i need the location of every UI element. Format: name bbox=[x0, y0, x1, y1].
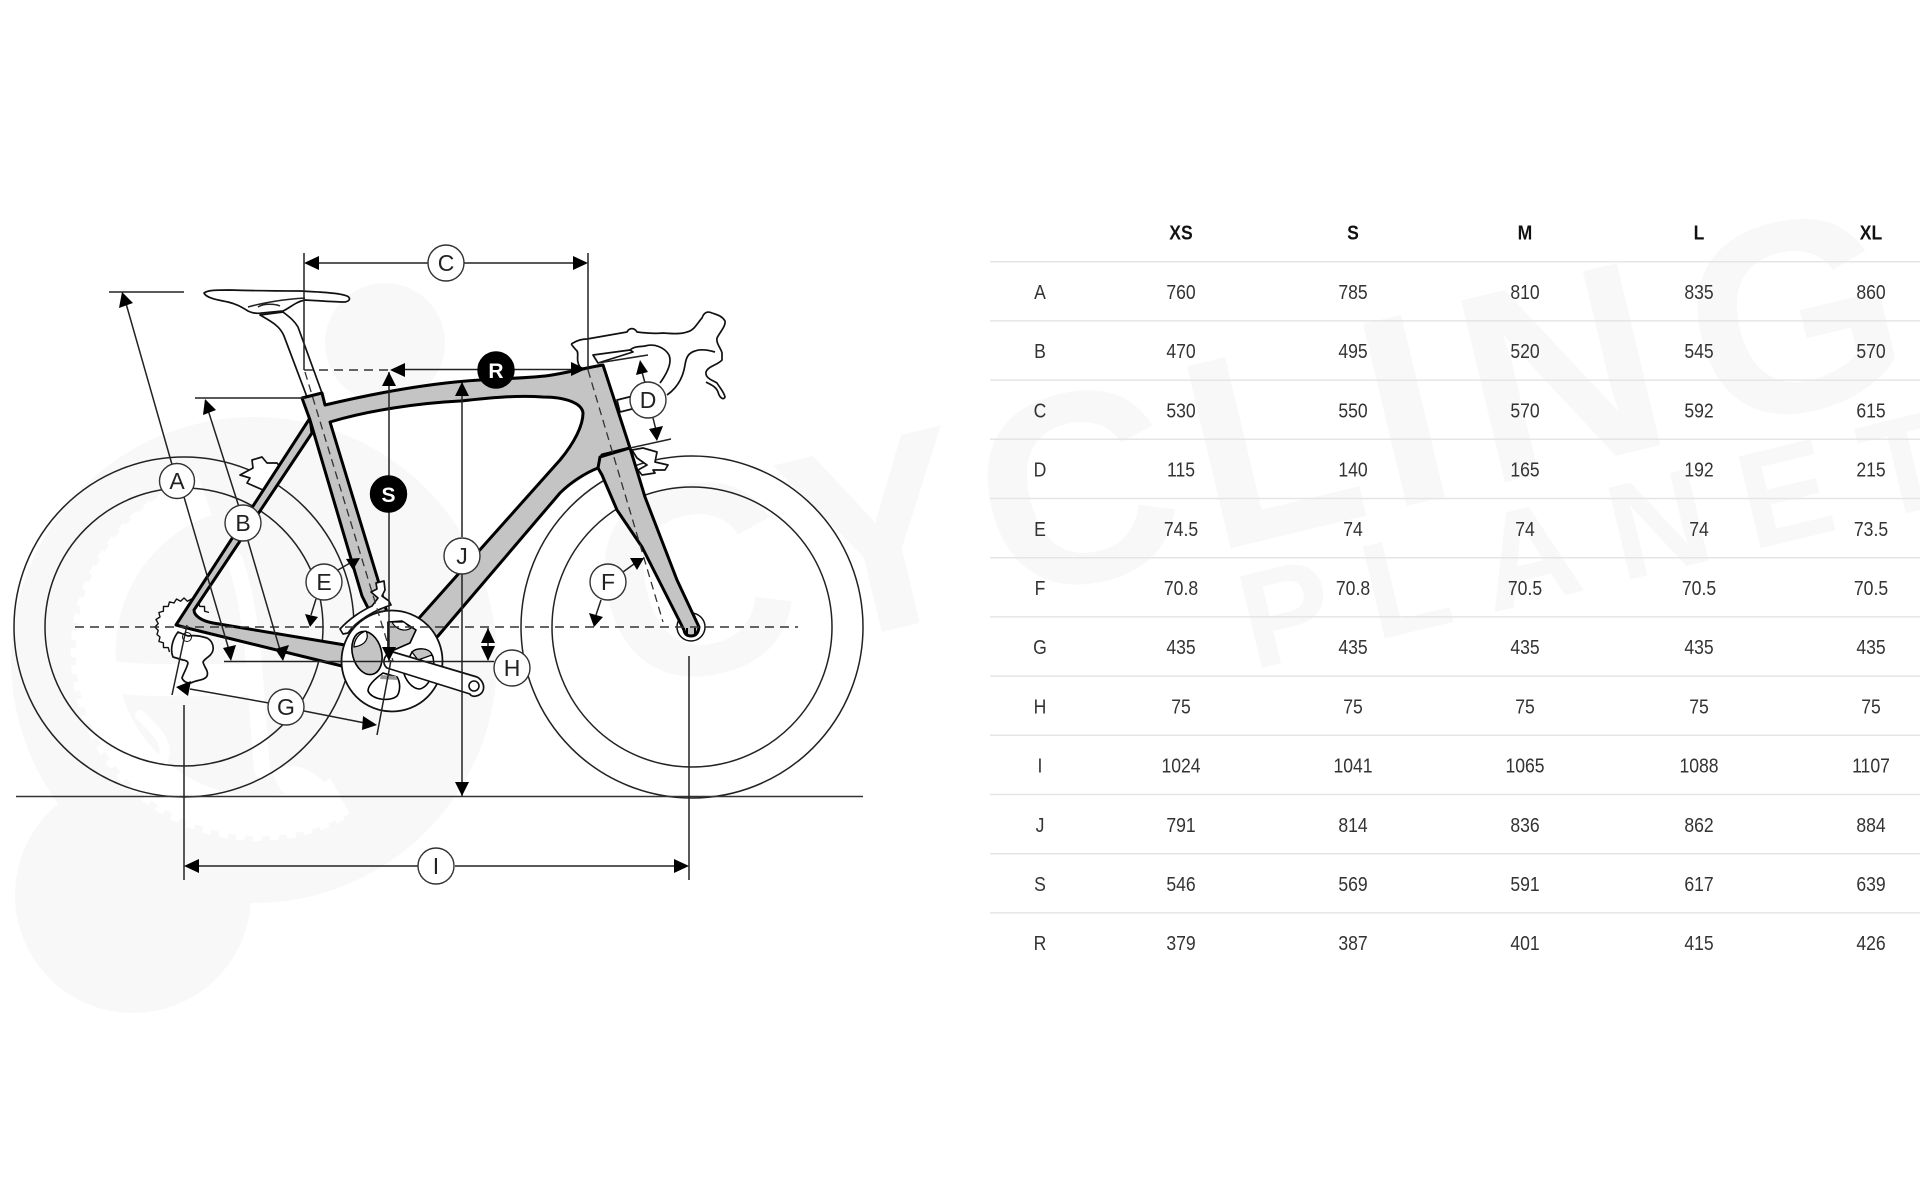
dimension H bbox=[481, 628, 530, 686]
column: S: S bbox=[1347, 221, 1359, 244]
column: M: 165 bbox=[1510, 459, 1540, 481]
column: L: 415 bbox=[1684, 932, 1714, 954]
center lines (dashed) bbox=[75, 370, 798, 661]
column: L: 617 bbox=[1684, 873, 1714, 895]
column: XL: 884 bbox=[1856, 814, 1886, 836]
column: XS bbox=[1161, 221, 1201, 954]
dimension D: D bbox=[640, 387, 656, 413]
dimension A bbox=[109, 292, 236, 661]
column: XS: 760 bbox=[1166, 281, 1196, 303]
dimension B: B bbox=[235, 510, 251, 536]
column: XS: 1024 bbox=[1161, 755, 1201, 777]
seat post bbox=[260, 312, 322, 397]
column: XL: 639 bbox=[1856, 873, 1886, 895]
watermark: logo wheel bbox=[11, 283, 497, 1013]
column: XS: XS bbox=[1169, 221, 1193, 244]
column: M: 1065 bbox=[1505, 755, 1545, 777]
column: XS: 791 bbox=[1166, 814, 1196, 836]
dimension J bbox=[444, 382, 480, 796]
baseline for A and B and H bbox=[224, 660, 494, 662]
column: S: 785 bbox=[1338, 281, 1368, 303]
dimension I bbox=[184, 656, 689, 884]
dimension C bbox=[304, 245, 588, 370]
handlebar bbox=[572, 312, 725, 399]
column: XL: 435 bbox=[1856, 636, 1886, 658]
dimension R: R bbox=[488, 360, 504, 383]
saddle rails bbox=[248, 298, 305, 307]
dimension S: S bbox=[381, 484, 396, 507]
table: geometry by size bbox=[990, 221, 1920, 954]
cassette bbox=[155, 598, 209, 652]
front axle slot bbox=[687, 628, 695, 636]
dimension B bbox=[195, 398, 305, 661]
column: L: 545 bbox=[1684, 340, 1714, 362]
dimension F bbox=[589, 558, 644, 627]
column: L: L bbox=[1694, 221, 1704, 244]
column: XL: 860 bbox=[1856, 281, 1886, 303]
rear triangle bbox=[176, 418, 345, 666]
column: XS: 530 bbox=[1166, 399, 1196, 422]
front wheel bbox=[521, 456, 863, 798]
column: M: 70.5 bbox=[1508, 577, 1542, 599]
column: dimension letters: E bbox=[1034, 518, 1046, 540]
dimension S bbox=[370, 372, 406, 661]
chainring: top opening bbox=[388, 621, 416, 650]
column: XS: 74.5 bbox=[1164, 518, 1198, 540]
column: M: 435 bbox=[1510, 636, 1540, 658]
dimension R bbox=[390, 352, 586, 388]
column: XL: 215 bbox=[1856, 459, 1886, 481]
rear wheel bbox=[14, 457, 354, 797]
dimension A: A bbox=[169, 468, 185, 494]
column: L: 592 bbox=[1684, 399, 1714, 422]
column: S: 550 bbox=[1338, 399, 1368, 422]
column: M: M bbox=[1518, 221, 1532, 244]
column: M: 520 bbox=[1510, 340, 1540, 362]
column: S: 75 bbox=[1343, 695, 1363, 718]
column: L: 1088 bbox=[1679, 755, 1719, 777]
stem bbox=[593, 350, 636, 412]
column: L: 192 bbox=[1684, 459, 1714, 481]
column: XL: 615 bbox=[1856, 399, 1886, 422]
chainring bbox=[342, 610, 442, 712]
column: S: 1041 bbox=[1333, 755, 1373, 777]
column: S bbox=[1333, 221, 1373, 954]
column: XS: 115 bbox=[1167, 459, 1195, 481]
dimension J: J bbox=[456, 543, 468, 569]
column: dimension letters: C bbox=[1034, 399, 1046, 422]
dimension G: G bbox=[277, 694, 295, 720]
fork bbox=[598, 448, 699, 636]
column: dimension letters: G bbox=[1033, 636, 1047, 658]
column: S: 569 bbox=[1338, 873, 1368, 895]
column: XS: 379 bbox=[1166, 932, 1196, 954]
column: S: 74 bbox=[1343, 518, 1363, 540]
column: XS: 546 bbox=[1166, 873, 1196, 895]
column: L: 75 bbox=[1689, 695, 1709, 718]
front axle bbox=[677, 613, 705, 641]
crank arm bbox=[384, 652, 484, 696]
chainring: left opening bbox=[347, 628, 387, 678]
column: S: 140 bbox=[1338, 459, 1368, 481]
column: L: 74 bbox=[1689, 518, 1709, 540]
dimension D bbox=[598, 355, 671, 448]
dimension C: C bbox=[438, 250, 454, 276]
chainring: bottom opening bbox=[368, 673, 400, 699]
column: XL: 426 bbox=[1856, 932, 1886, 954]
column: S: 495 bbox=[1338, 340, 1368, 362]
column: XS: 70.8 bbox=[1164, 577, 1198, 599]
column: M: 836 bbox=[1510, 814, 1540, 836]
column: XS: 435 bbox=[1166, 636, 1196, 658]
dimension H: H bbox=[504, 655, 520, 681]
column: M: 591 bbox=[1510, 873, 1540, 895]
column: dimension letters bbox=[1033, 281, 1047, 954]
front derailleur bbox=[340, 581, 391, 634]
column: dimension letters: D bbox=[1034, 459, 1046, 481]
column: M: 401 bbox=[1510, 932, 1540, 954]
column: XL: XL bbox=[1860, 221, 1882, 244]
dimension E: E bbox=[316, 569, 332, 595]
column: XL: 570 bbox=[1856, 340, 1886, 362]
dimension I: I bbox=[433, 853, 439, 879]
column: L: 435 bbox=[1684, 636, 1714, 658]
column: S: 814 bbox=[1338, 814, 1368, 836]
column: M: 810 bbox=[1510, 281, 1540, 303]
rear brake bbox=[240, 457, 283, 490]
column: L: 70.5 bbox=[1682, 577, 1716, 599]
column: L: 835 bbox=[1684, 281, 1714, 303]
column: M: 570 bbox=[1510, 399, 1540, 422]
column: dimension letters: H bbox=[1034, 695, 1046, 718]
column: XL: 1107 bbox=[1852, 755, 1890, 777]
main frame bbox=[302, 365, 630, 672]
dimension F: F bbox=[601, 569, 615, 595]
column: M bbox=[1505, 221, 1545, 954]
chainring: right opening bbox=[403, 649, 434, 689]
table rules bbox=[990, 262, 1920, 913]
column: S: 70.8 bbox=[1336, 577, 1370, 599]
column: dimension letters: A bbox=[1034, 281, 1046, 303]
column: S: 435 bbox=[1338, 636, 1368, 658]
column: S: 387 bbox=[1338, 932, 1368, 954]
column: dimension letters: F bbox=[1035, 577, 1045, 599]
column: dimension letters: S bbox=[1034, 873, 1046, 895]
column: L bbox=[1679, 221, 1719, 954]
column: M: 75 bbox=[1515, 695, 1535, 718]
ground line bbox=[16, 796, 863, 798]
column: M: 74 bbox=[1515, 518, 1535, 540]
column: XS: 75 bbox=[1171, 695, 1191, 718]
column: XS: 470 bbox=[1166, 340, 1196, 362]
column: XL bbox=[1852, 221, 1890, 954]
column: L: 862 bbox=[1684, 814, 1714, 836]
column: XL: 73.5 bbox=[1854, 518, 1888, 540]
watermark: logo and wordmark bbox=[11, 144, 1920, 1013]
saddle bbox=[204, 290, 349, 313]
column: XL: 75 bbox=[1861, 695, 1881, 718]
dimension E bbox=[305, 558, 360, 627]
column: dimension letters: I bbox=[1038, 755, 1042, 777]
rear derailleur bbox=[172, 632, 213, 683]
dimension G bbox=[172, 625, 391, 735]
column: dimension letters: R bbox=[1034, 932, 1046, 954]
column: XL: 70.5 bbox=[1854, 577, 1888, 599]
column: dimension letters: J bbox=[1036, 814, 1044, 836]
column: dimension letters: B bbox=[1034, 340, 1046, 362]
front brake bbox=[632, 448, 668, 475]
watermark: CYCLING: CYCLING bbox=[562, 144, 1920, 751]
